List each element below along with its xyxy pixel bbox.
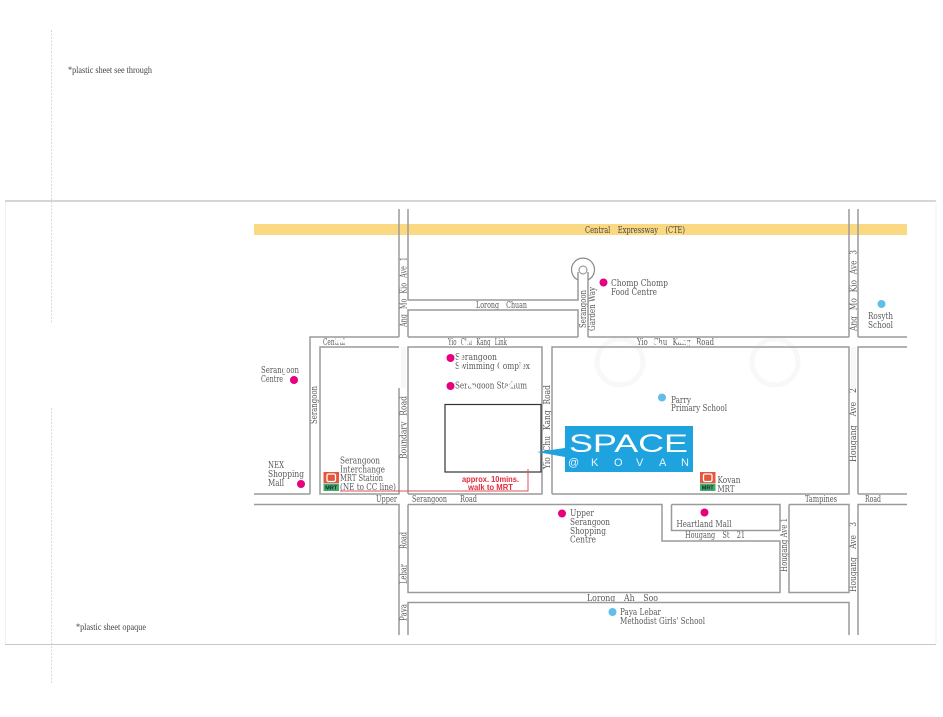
place: Serangoon Stadium: Serangoon Stadium — [455, 382, 528, 392]
station: Serangoon Interchange MRT: Interchange — [340, 466, 385, 476]
callout: SPACE @ KOVAN logo: SPACE — [569, 430, 688, 458]
place: Rosyth School: Rosyth — [868, 312, 893, 322]
site outline — [445, 404, 541, 472]
road labels: Serangoon — [310, 386, 320, 424]
road labels: Road — [400, 532, 410, 549]
place: Rosyth School: School — [868, 321, 893, 331]
note: plastic sheet opaque: *plastic sheet opaque — [76, 622, 146, 632]
road labels: Hougang Ave 3 — [849, 522, 859, 592]
callout: walk time: approx. 10mins. — [462, 474, 519, 484]
station: Serangoon Interchange MRT: MRT — [325, 486, 338, 492]
station: Serangoon Interchange MRT: Serangoon — [340, 456, 380, 466]
station: Serangoon Interchange MRT: MRT Station — [340, 474, 383, 484]
road labels: Serangoon — [412, 495, 447, 505]
road labels: Tampines — [805, 495, 837, 505]
road labels: Ang Mo Kio Ave 1 — [400, 257, 410, 328]
expressway band: CTE — [254, 224, 907, 235]
station: Kovan MRT — [700, 472, 741, 495]
road labels: Road — [865, 495, 881, 505]
road labels: Lorong Ah Soo — [587, 594, 658, 604]
place: Chomp Chomp Food Centre: Food Centre — [611, 288, 657, 298]
station: Kovan MRT: Kovan — [718, 476, 741, 486]
roundabout — [572, 258, 595, 280]
place: Chomp Chomp Food Centre: Chomp Chomp — [611, 279, 668, 289]
place: Parry Primary School: Primary School — [671, 404, 727, 414]
place: Rosyth School — [868, 300, 893, 331]
white watermark over labels — [285, 331, 706, 393]
note: plastic sheet see through: *plastic sheet see through — [68, 65, 152, 75]
place: NEX Shopping Mall: NEX — [268, 461, 285, 471]
place: Serangoon Centre — [261, 366, 299, 385]
callout: walk time — [462, 474, 519, 492]
road labels: Hougang Ave 2 — [849, 388, 859, 462]
place: Chomp Chomp Food Centre — [600, 278, 668, 298]
place: NEX Shopping Mall — [268, 461, 305, 489]
place: Parry Primary School: Parry — [671, 396, 691, 406]
place: Upper Serangoon Shopping Centre: Centre — [570, 536, 596, 546]
road labels: Hougang St 21 — [685, 531, 745, 541]
road labels: Serangoon — [579, 290, 589, 328]
road network — [254, 209, 907, 635]
place: Parry Primary School — [658, 394, 727, 414]
road labels: Central — [323, 338, 345, 348]
place: Serangoon Swimming Complex: Serangoon — [455, 353, 497, 363]
station: Kovan MRT: MRT — [718, 485, 735, 495]
road labels: Central Expressway (CTE) — [585, 225, 685, 236]
road labels: Paya — [400, 604, 410, 621]
callout: SPACE @ KOVAN logo: @KOVAN — [568, 457, 689, 469]
place: Serangoon Centre: Serangoon — [261, 366, 299, 376]
callout: walk time: walk to MRT — [467, 482, 514, 492]
callout: SPACE @ KOVAN logo — [537, 426, 693, 472]
place: Serangoon Centre: Centre — [261, 375, 283, 385]
road labels: Garden Way — [588, 287, 598, 331]
place: Upper Serangoon Shopping Centre — [558, 509, 610, 546]
station: Kovan MRT: MRT — [702, 486, 714, 492]
road labels: Lorong Chuan — [476, 301, 527, 311]
place: Paya Lebar Methodist Girls' School — [608, 608, 705, 627]
road labels: Lebar — [400, 563, 410, 584]
place: Paya Lebar Methodist Girls' School: Methodist Girls' School — [620, 617, 705, 627]
road labels: Ang Mo Kio Ave 3 — [850, 250, 860, 332]
road labels: Yio Chu Kang Road — [636, 338, 714, 348]
station: Serangoon Interchange MRT — [324, 456, 396, 493]
station: Serangoon Interchange MRT: (NE to CC line) — [340, 482, 396, 493]
road labels: Hougang Ave 1 — [780, 518, 790, 572]
place: Upper Serangoon Shopping Centre: Shopping — [570, 527, 606, 537]
place: Heartland Mall — [676, 508, 732, 530]
road labels: Upper — [376, 495, 398, 505]
place: Serangoon Swimming Complex: Swimming Complex — [455, 362, 530, 372]
walking route to MRT — [340, 469, 528, 491]
place: Heartland Mall: Heartland Mall — [676, 520, 732, 530]
road labels: Yio Chu Kang Link — [447, 338, 507, 348]
place: Upper Serangoon Shopping Centre: Serangoon — [570, 518, 610, 528]
road labels: Boundary Road — [400, 396, 410, 459]
road labels — [310, 225, 881, 621]
place: Paya Lebar Methodist Girls' School: Paya Lebar — [620, 608, 662, 618]
place: NEX Shopping Mall: Shopping — [268, 470, 304, 480]
place: Upper Serangoon Shopping Centre: Upper — [570, 509, 595, 519]
place: Serangoon Swimming Complex — [446, 353, 530, 372]
faint watermark shapes — [404, 339, 854, 388]
road labels: Yio Chu Kang Road — [543, 385, 553, 470]
road labels: Road — [460, 495, 477, 505]
place: NEX Shopping Mall: Mall — [268, 479, 284, 489]
